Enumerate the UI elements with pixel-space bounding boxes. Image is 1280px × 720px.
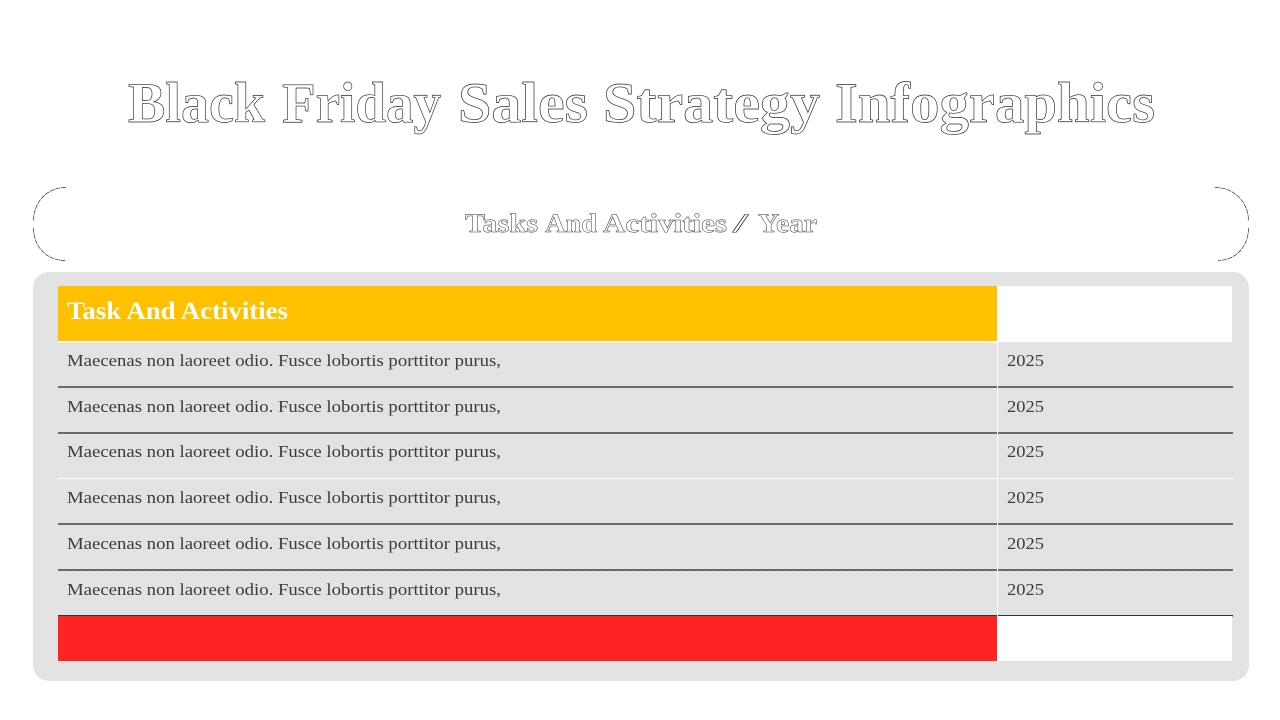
banner heading: / bbox=[731, 209, 750, 238]
row 3 bbox=[67, 442, 1044, 461]
banner right bracket bbox=[1215, 188, 1248, 260]
banner left bracket bbox=[34, 188, 66, 260]
title: Friday bbox=[282, 72, 441, 135]
row 6: Maecenas non laoreet odio. Fusce lobortis porttitor purus, bbox=[67, 580, 501, 599]
row dividers bbox=[58, 341, 1233, 616]
title: Black bbox=[128, 72, 265, 135]
subtitle banner bbox=[34, 188, 1248, 260]
row 1: 2025 bbox=[1007, 351, 1044, 370]
row 4: 2025 bbox=[1007, 488, 1044, 507]
panel background bbox=[33, 272, 1249, 681]
title: Infographics bbox=[835, 72, 1155, 135]
row 5 bbox=[67, 534, 1044, 553]
banner heading: Activities bbox=[603, 209, 727, 238]
panel: task table bbox=[33, 272, 1249, 681]
row 4 bbox=[67, 488, 1044, 507]
banner heading: Tasks bbox=[465, 209, 538, 238]
row 3: 2025 bbox=[1007, 442, 1044, 461]
row 2: Maecenas non laoreet odio. Fusce lobortis porttitor purus, bbox=[67, 397, 501, 416]
row 2 bbox=[67, 397, 1044, 416]
row 4: Maecenas non laoreet odio. Fusce lobortis porttitor purus, bbox=[67, 488, 501, 507]
title bbox=[128, 72, 1155, 135]
table header: task and activities: Task And Activities bbox=[67, 298, 288, 325]
table header: task and activities bbox=[58, 286, 1232, 342]
banner heading: Year bbox=[758, 209, 817, 238]
banner heading bbox=[465, 209, 817, 238]
title: Strategy bbox=[603, 72, 820, 135]
row 5: Maecenas non laoreet odio. Fusce lobortis porttitor purus, bbox=[67, 534, 501, 553]
row 5: 2025 bbox=[1007, 534, 1044, 553]
table footer bbox=[58, 616, 1232, 661]
row 1 bbox=[67, 351, 1044, 370]
row 6: 2025 bbox=[1007, 580, 1044, 599]
title: Sales bbox=[458, 72, 588, 135]
row 2: 2025 bbox=[1007, 397, 1044, 416]
row 3: Maecenas non laoreet odio. Fusce lobortis porttitor purus, bbox=[67, 442, 501, 461]
row 1: Maecenas non laoreet odio. Fusce lobortis porttitor purus, bbox=[67, 351, 501, 370]
banner heading: And bbox=[545, 209, 598, 238]
row 6 bbox=[67, 580, 1044, 599]
